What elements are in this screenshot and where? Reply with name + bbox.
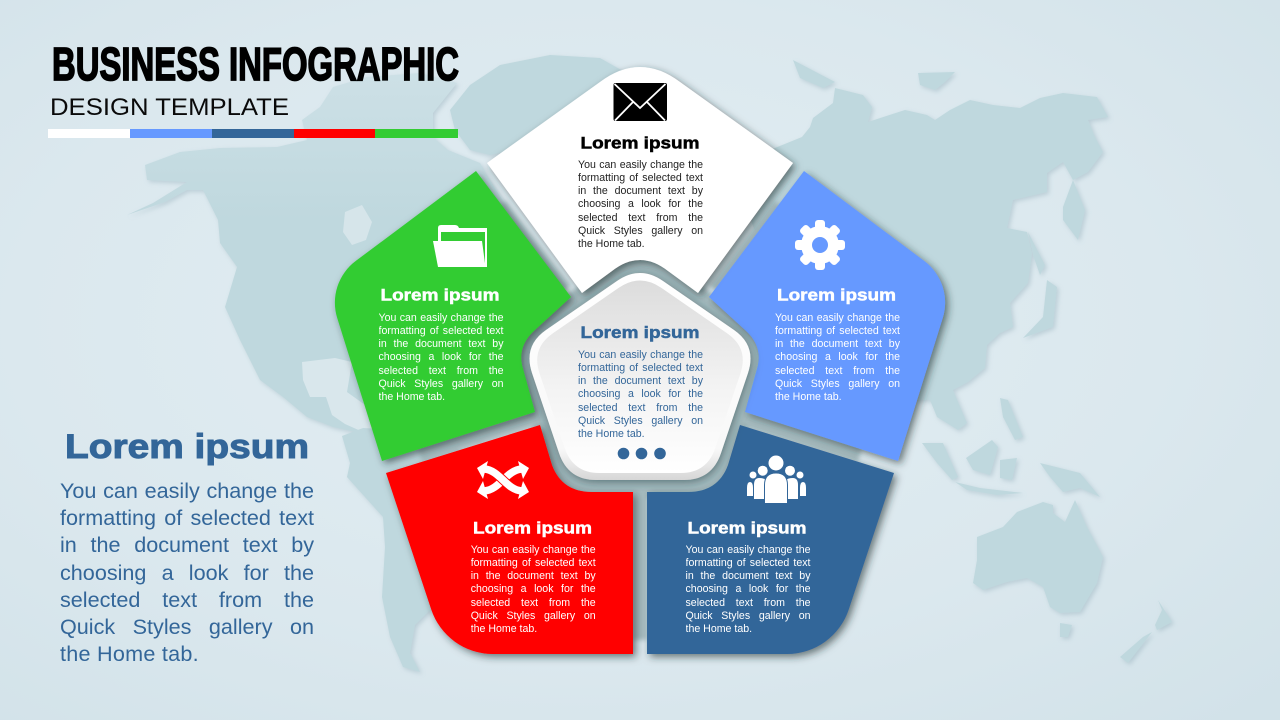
panel: centre pentagon: You can easily change the: [578, 348, 703, 360]
panel: white top: formatting of selected text: [578, 172, 703, 184]
panel: dark blue: selected text from the: [686, 596, 810, 608]
icon: three dots: [618, 448, 666, 459]
panel: dark blue: [647, 425, 894, 654]
left text block: Quick Styles gallery on: [60, 614, 314, 639]
panel: dark blue: Quick Styles gallery on: [686, 610, 810, 622]
panel: centre pentagon: [529, 273, 751, 480]
panel: white top: choosing a look for the: [578, 198, 703, 210]
panel: blue: Quick Styles gallery on: [775, 378, 900, 390]
map: kamchatka: [1063, 180, 1085, 240]
map: philippines: [1000, 398, 1023, 440]
map: tasmania: [1060, 623, 1072, 637]
left text block: formatting of selected text: [60, 505, 314, 530]
map: novaya zemlya: [793, 60, 835, 88]
map: south america: [342, 428, 500, 672]
map: borneo: [966, 440, 998, 475]
left text block: in the document text by: [60, 532, 314, 557]
panel: centre pentagon: selected text from the: [578, 402, 703, 414]
colour bar: [48, 129, 458, 138]
panel: blue: choosing a look for the: [775, 351, 900, 363]
panel: green: choosing a look for the: [378, 351, 504, 363]
gap shading behind panels: [420, 205, 860, 640]
map: java: [955, 482, 1023, 495]
panel: dark blue: You can easily change the: [686, 544, 810, 556]
map: greenland: [450, 55, 640, 155]
panel: green: formatting of selected text: [378, 325, 504, 337]
map: hudson bay: [343, 205, 372, 245]
panel: blue: You can easily change the: [775, 312, 900, 324]
panel: green: Quick Styles gallery on: [378, 378, 504, 390]
panel: centre pentagon: formatting of selected text: [578, 362, 703, 374]
panel: blue: formatting of selected text: [775, 325, 900, 337]
panel: white top: You can easily change the: [578, 158, 703, 170]
panel: white top: the Home tab.: [578, 238, 645, 250]
panel: blue: the Home tab.: [775, 391, 842, 403]
panel: white top: Quick Styles gallery on: [578, 225, 703, 237]
map: north america: [127, 73, 520, 440]
panel: green: the Home tab.: [378, 391, 445, 403]
left text block: choosing a look for the: [60, 560, 314, 585]
panel: dark blue: in the document text by: [686, 570, 810, 582]
panel: red: formatting of selected text: [471, 557, 596, 569]
panel: red: [386, 425, 633, 654]
panel: blue: Lorem ipsum: [777, 286, 896, 305]
left text block: selected text from the: [60, 587, 314, 612]
left text block: Lorem ipsum: [65, 428, 309, 466]
map: sumatra: [922, 443, 958, 480]
panel: red: You can easily change the: [471, 544, 596, 556]
map: new guinea: [1040, 463, 1100, 497]
map: arctic islands: [918, 72, 955, 90]
panel: green: in the document text by: [378, 338, 504, 350]
map: sakhalin: [1028, 232, 1045, 275]
panel: dark blue: choosing a look for the: [686, 583, 810, 595]
panel: centre pentagon: Lorem ipsum: [580, 323, 700, 342]
icon: shuffle arrows: [477, 461, 529, 499]
panel: dark blue: formatting of selected text: [686, 557, 810, 569]
icon: people: [747, 456, 806, 504]
left text block: [60, 428, 314, 669]
panel: centre pentagon: in the document text by: [578, 375, 703, 387]
panel: white top: [487, 67, 793, 293]
panel: dark blue: the Home tab.: [686, 623, 752, 635]
panel: blue: in the document text by: [775, 338, 900, 350]
panel: red: Quick Styles gallery on: [471, 610, 596, 622]
panel: red: selected text from the: [471, 596, 596, 608]
map: australia: [973, 500, 1103, 613]
world map: [127, 55, 1172, 672]
panel: green: You can easily change the: [378, 312, 504, 324]
title: BUSINESS INFOGRAPHIC: [52, 38, 459, 90]
panel: red: Lorem ipsum: [473, 518, 592, 537]
left text block: You can easily change the: [60, 478, 314, 503]
map: gulf of mexico: [302, 358, 372, 436]
panel: white top: in the document text by: [578, 185, 703, 197]
panel: blue: [709, 171, 945, 461]
map: new zealand south: [1120, 632, 1152, 663]
map: asia: [740, 88, 1108, 440]
map: sulawesi: [1000, 458, 1017, 480]
panel: centre pentagon: the Home tab.: [578, 428, 645, 440]
panel: blue: selected text from the: [775, 364, 900, 376]
icon: gear: [795, 220, 845, 270]
panel: centre pentagon: Quick Styles gallery on: [578, 415, 703, 427]
icon: folder: [433, 225, 487, 267]
panel: centre pentagon: choosing a look for the: [578, 388, 703, 400]
panel: dark blue: Lorem ipsum: [688, 518, 806, 537]
panel: white top: selected text from the: [578, 212, 703, 224]
title: DESIGN TEMPLATE: [50, 94, 289, 121]
title: [50, 38, 459, 121]
left text block: the Home tab.: [60, 641, 199, 666]
panel: red: the Home tab.: [471, 623, 537, 635]
panel: green: [335, 171, 571, 461]
map: new zealand north: [1155, 600, 1172, 630]
panel: red: in the document text by: [471, 570, 596, 582]
panel: red: choosing a look for the: [471, 583, 596, 595]
icon: envelope: [614, 83, 667, 121]
map: japan: [1023, 280, 1057, 338]
panel: green: Lorem ipsum: [380, 286, 500, 305]
panel: green: selected text from the: [378, 364, 504, 376]
panel: white top: Lorem ipsum: [580, 133, 700, 152]
